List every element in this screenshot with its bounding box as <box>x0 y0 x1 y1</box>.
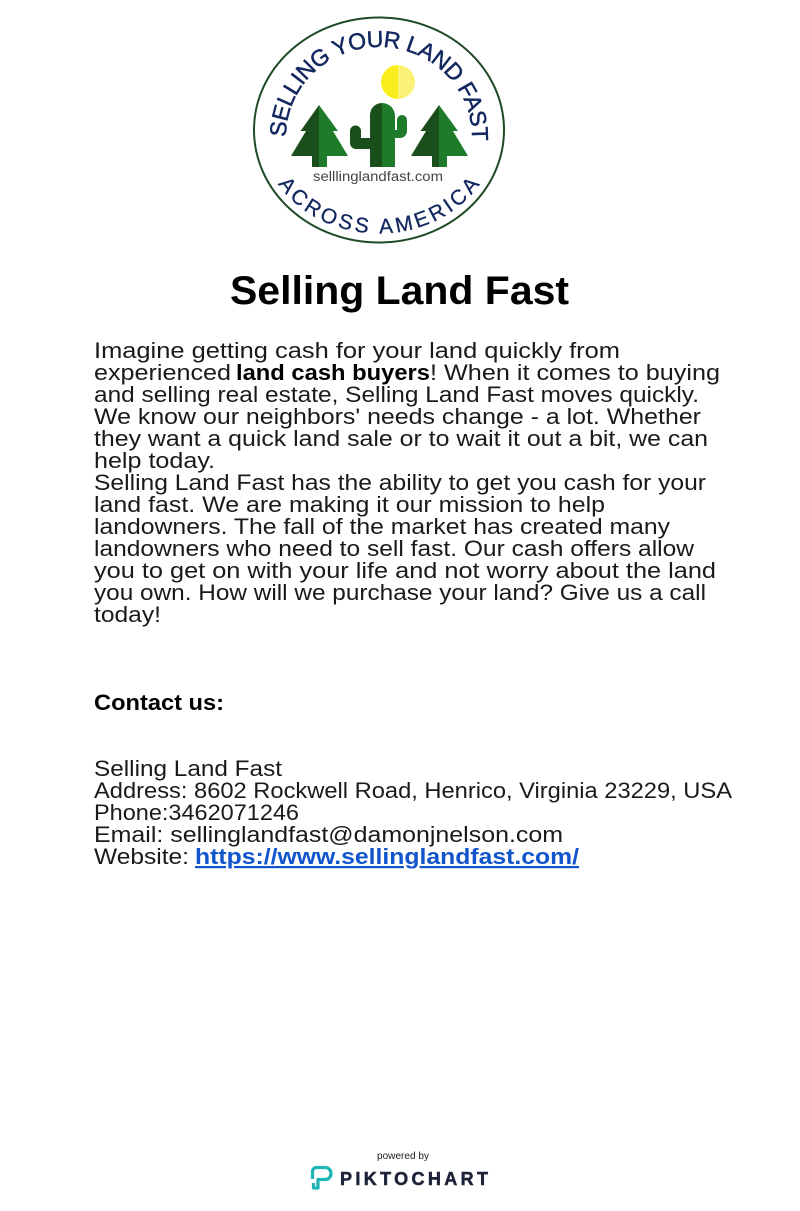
logo badge <box>253 16 505 244</box>
intro text block: land fast. We are making it our mission to help <box>94 492 605 517</box>
intro text block: Imagine getting cash for your land quickly from <box>94 338 620 363</box>
contact heading: Contact us: <box>94 690 224 715</box>
contact details <box>94 756 732 869</box>
contact details: Selling Land Fast <box>94 756 282 781</box>
badge url: selllinglandfast.com <box>313 169 443 184</box>
intro text block: you own. How will we purchase your land? Give us a call <box>94 580 706 605</box>
contact details: Address: 8602 Rockwell Road, Henrico, Virginia 23229, USA <box>94 778 732 803</box>
intro text block: and selling real estate, Selling Land Fast moves quickly. <box>94 382 699 407</box>
intro text block: landowners. The fall of the market has created many <box>94 514 670 539</box>
icon: cactus <box>350 103 407 167</box>
intro text block: We know our neighbors' needs change - a lot. Whether <box>94 404 701 429</box>
piktochart footer <box>312 1151 488 1189</box>
intro text block: landowners who need to sell fast. Our cash offers allow <box>94 536 694 561</box>
intro text block: land cash buyers <box>236 360 430 385</box>
powered by label: powered by <box>377 1151 429 1162</box>
intro text block: ! When it comes to buying <box>430 360 720 385</box>
intro text block: today! <box>94 602 161 627</box>
title: Selling Land Fast <box>230 269 569 313</box>
contact details: Phone:3462071246 <box>94 800 299 825</box>
contact details: Email: sellinglandfast@damonjnelson.com <box>94 822 563 847</box>
intro text block: Selling Land Fast has the ability to get you cash for your <box>94 470 706 495</box>
intro text block: help today. <box>94 448 215 473</box>
intro text block: you to get on with your life and not worry about the land <box>94 558 716 583</box>
contact details: Website: <box>94 844 189 869</box>
badge ring <box>254 18 504 242</box>
website link: https://www.sellinglandfast.com/ <box>195 844 579 869</box>
badge text: selling your land fast: SELLING YOUR LAND FAST <box>270 30 488 140</box>
icon: right pine tree <box>411 105 468 167</box>
intro text block: they want a quick land sale or to wait it out a bit, we can <box>94 426 708 451</box>
icon: piktochart mark <box>312 1168 331 1188</box>
badge text: across america: ACROSS AMERICA <box>278 179 480 234</box>
piktochart wordmark: PIKTOCHART <box>340 1169 488 1189</box>
intro text block <box>94 338 720 627</box>
icon: left pine tree <box>291 105 348 167</box>
intro text block: experienced <box>94 360 231 385</box>
icon: sun <box>381 65 415 99</box>
